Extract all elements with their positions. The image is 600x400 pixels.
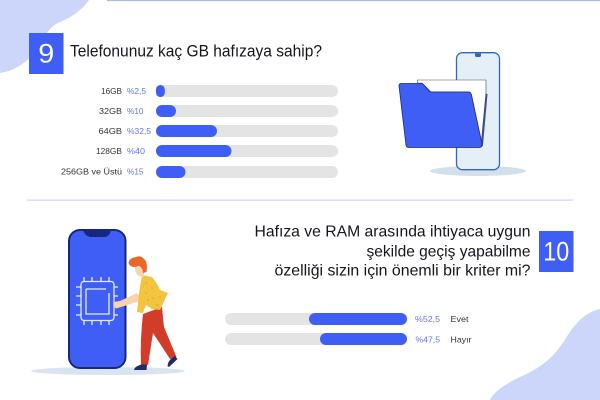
bar row: 32GB: %10 xyxy=(127,106,144,116)
bar row: 256GB ve Üstü: 256GB ve Üstü xyxy=(61,166,122,176)
shoes xyxy=(134,356,178,370)
ground shadow xyxy=(31,367,185,375)
person xyxy=(114,256,178,370)
bar row: 16GB: 16GB xyxy=(101,86,122,96)
bar row: 32GB xyxy=(99,105,338,117)
bar row: 32GB: 32GB xyxy=(99,106,122,116)
icon: folder xyxy=(399,80,488,148)
heading: question 10: Hafıza ve RAM arasında ihtiyaca uygun xyxy=(254,224,530,240)
heading: question 10: şekilde geçiş yapabilme xyxy=(366,244,531,260)
bar row: 16GB xyxy=(101,85,338,97)
section 10: RAM switching question xyxy=(31,224,574,375)
icon: chip xyxy=(76,277,118,325)
arm xyxy=(114,293,141,308)
bar row: 64GB xyxy=(98,125,338,137)
bar row: 128GB xyxy=(96,145,338,157)
bar row: Hayır: %47,5 xyxy=(416,334,440,344)
bar row: 128GB: %40 xyxy=(127,146,145,156)
bar row: Evet: Evet xyxy=(450,314,469,324)
badge: number 10: 10 xyxy=(543,236,569,266)
badge: number 9 xyxy=(29,33,64,74)
illustration: person and phone with chip xyxy=(31,230,185,375)
head xyxy=(135,266,144,277)
heading: question 9: Telefonunuz kaç GB hafızaya sahip? xyxy=(70,42,322,60)
trousers xyxy=(141,307,176,365)
bar row: 128GB: 128GB xyxy=(96,146,122,156)
decorative blob: top left xyxy=(0,0,89,73)
heading: question 10: özelliği sizin için önemli bir kriter mi? xyxy=(274,262,531,280)
bar row: Evet: %52,5 xyxy=(415,314,440,324)
bar row: 256GB ve Üstü: %15 xyxy=(127,166,144,176)
bar row: 16GB: %2,5 xyxy=(127,86,146,96)
bar row: 256GB ve Üstü xyxy=(61,166,338,178)
shirt xyxy=(137,275,168,313)
bar row: 64GB: %32,5 xyxy=(127,126,151,136)
icon: large phone xyxy=(69,230,126,368)
badge: number 9: 9 xyxy=(38,38,54,68)
badge: number 10 xyxy=(539,231,574,272)
bar chart: yes and no xyxy=(225,313,472,345)
ground shadow xyxy=(430,166,526,176)
section 9: phone memory question xyxy=(29,33,526,178)
bar row: Hayır: Hayır xyxy=(450,334,472,344)
bar row: Evet xyxy=(225,313,469,325)
hair xyxy=(128,256,147,273)
bar chart: memory capacity xyxy=(61,85,338,178)
illustration: phone and folder xyxy=(399,53,526,176)
decorative blob: bottom right xyxy=(490,309,600,400)
bar row: 64GB: 64GB xyxy=(98,126,122,136)
icon: phone outline xyxy=(456,53,500,170)
bar row: Hayır xyxy=(225,333,472,345)
heading: question 10 xyxy=(254,224,531,280)
